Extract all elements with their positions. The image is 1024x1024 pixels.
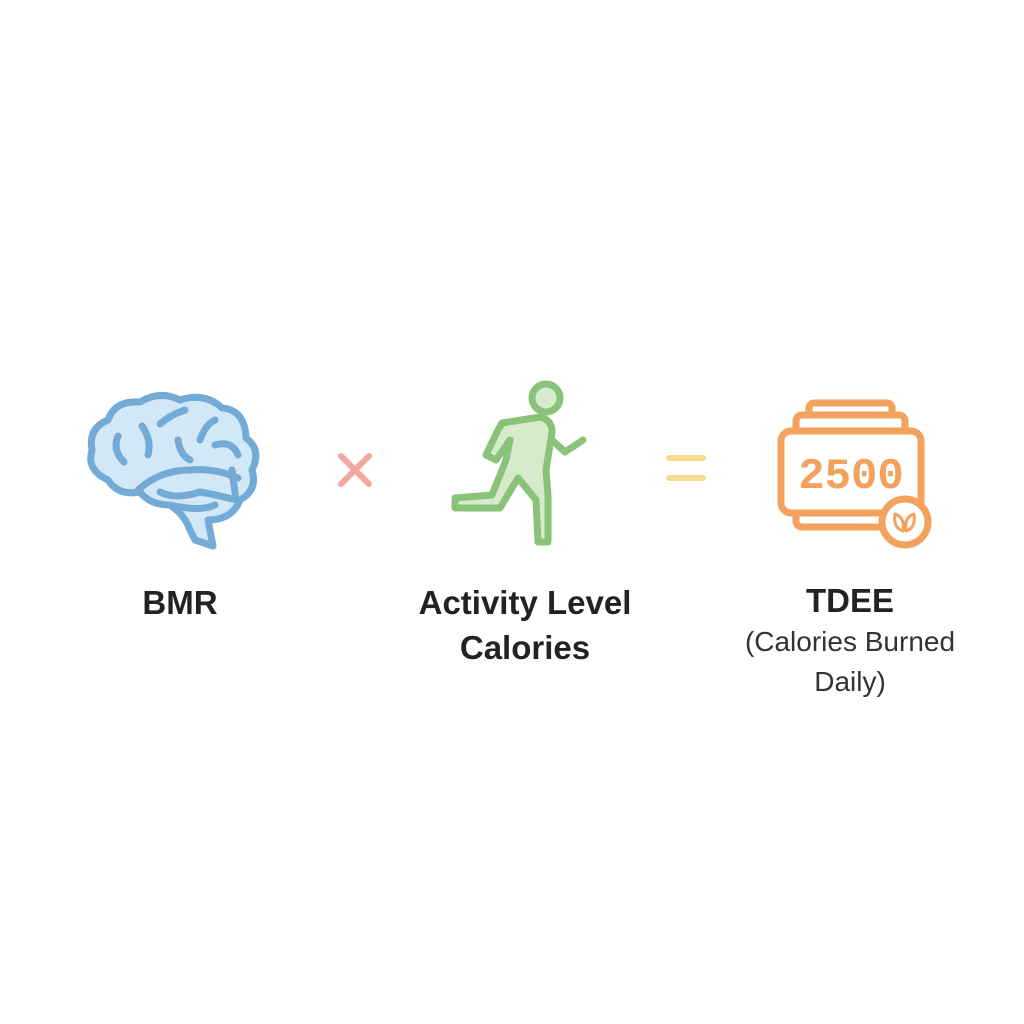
text: TDEE subtitle: (Calories Burned (745, 626, 955, 657)
label: Activity Level Calories (419, 584, 631, 666)
label: TDEE: TDEE (806, 582, 894, 619)
icon: runner (455, 384, 583, 542)
text: TDEE subtitle: Daily) (814, 666, 886, 697)
icon: multiply sign (341, 456, 369, 484)
icon: equals sign (669, 458, 703, 478)
icon: calorie counter: 2500 (798, 452, 904, 502)
text: TDEE subtitle (745, 626, 955, 697)
label: Activity Level Calories: Calories (460, 629, 590, 666)
icon: brain (91, 395, 256, 546)
label: Activity Level Calories: Activity Level (419, 584, 631, 621)
icon: calorie counter (781, 403, 928, 545)
label: BMR: BMR (142, 584, 218, 621)
